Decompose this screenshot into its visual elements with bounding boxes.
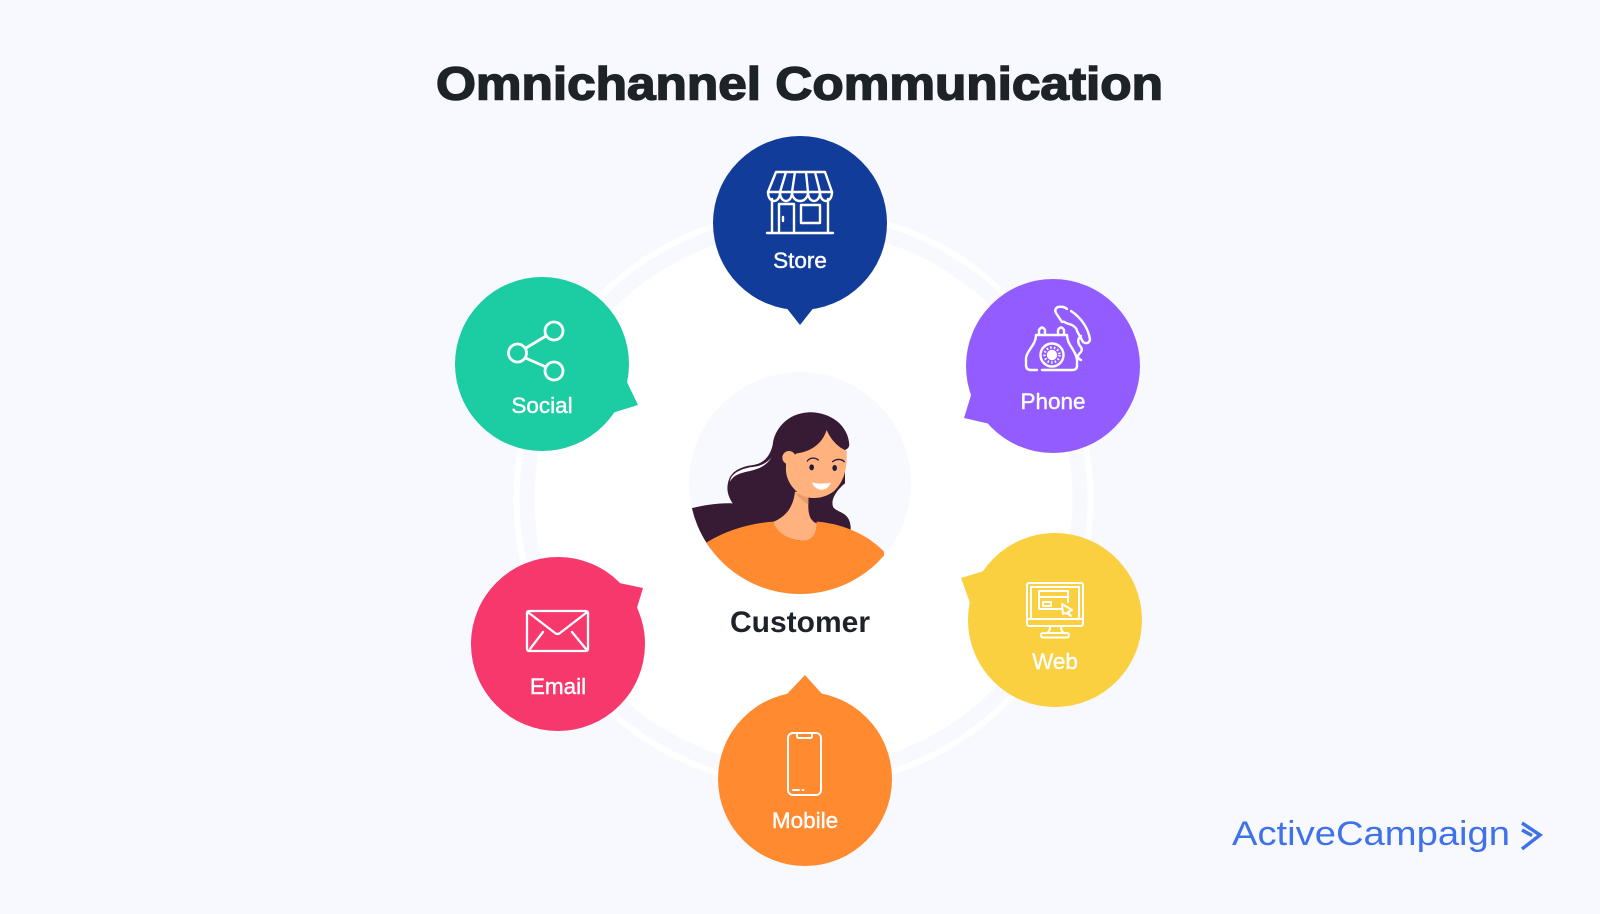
bubble: web — [961, 533, 1142, 707]
bubble: email — [471, 557, 645, 731]
icon: social — [508, 322, 563, 380]
label: social: Social — [511, 393, 573, 418]
icon: phone — [1026, 307, 1090, 370]
icon: web — [1027, 583, 1083, 638]
icon: store — [767, 172, 833, 233]
central ring — [516, 212, 1090, 786]
icon: email — [527, 611, 588, 651]
logo: ActiveCampaign: ActiveCampaign — [1232, 815, 1510, 853]
label: email: Email — [530, 674, 586, 699]
customer label: Customer — [730, 606, 870, 639]
title: Omnichannel Communication — [436, 58, 1163, 110]
bubble: phone — [964, 279, 1140, 453]
label: mobile: Mobile — [772, 808, 838, 833]
label: store: Store — [773, 248, 827, 273]
icon: mobile — [788, 733, 821, 795]
bubble: store — [713, 136, 887, 325]
customer avatar — [692, 412, 884, 594]
icon: logo chevron — [1522, 823, 1540, 849]
bubble: mobile — [718, 675, 892, 866]
label: web: Web — [1032, 649, 1078, 674]
bubble: social — [455, 277, 638, 451]
label: phone: Phone — [1020, 389, 1086, 414]
